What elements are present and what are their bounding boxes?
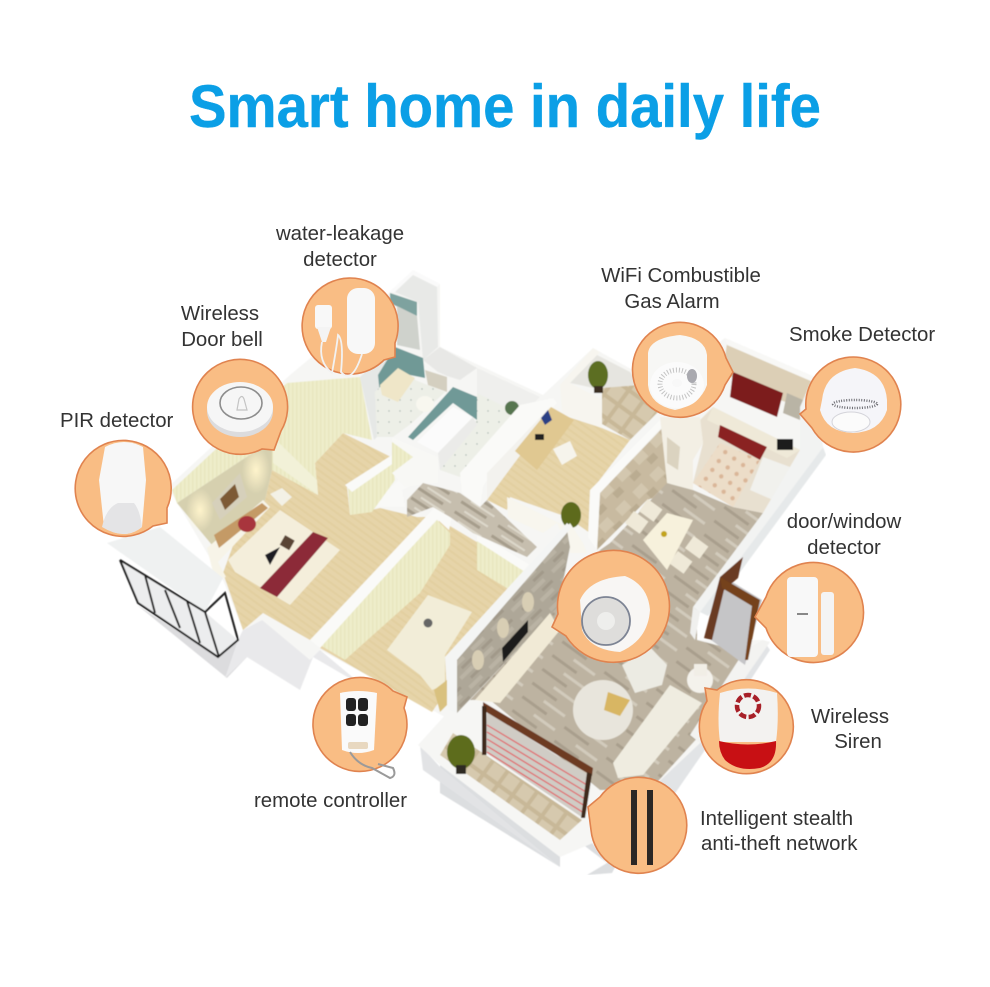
label: wireless door bell: Door bell: [181, 329, 263, 351]
study tile floor: [602, 385, 660, 440]
icon: key ring: [350, 752, 394, 778]
balcony railing: [120, 560, 238, 657]
kitchen carpet: [693, 443, 760, 507]
label: PIR detector: PIR detector: [60, 410, 174, 432]
label: anti-theft network: anti-theft network: [701, 833, 858, 855]
icon: alarm hub: [580, 576, 650, 652]
tub walls: [408, 387, 477, 440]
washbasin unit: [380, 368, 415, 402]
door wall: [690, 607, 700, 640]
kitchen back wall: [723, 343, 813, 407]
title: Smart home in daily life: [189, 73, 821, 140]
TV: [502, 620, 528, 662]
building footprint: [168, 270, 823, 863]
icon: infrared bars: [631, 790, 653, 865]
appliance: [783, 393, 803, 420]
icon: PIR sensor: [99, 442, 146, 534]
armchair: [622, 647, 667, 693]
lower cabinets: [718, 425, 767, 460]
label: water-leakage detector: water-leakage: [275, 223, 404, 245]
label: gas alarm: WiFi Combustible: [601, 265, 761, 287]
label: anti-theft network: [700, 808, 858, 855]
callout: anti-theft network: [588, 777, 687, 873]
callout: water leakage: [302, 278, 398, 376]
label: door/window detector: door/window: [787, 511, 902, 533]
bedroom back wall stripes: [172, 377, 372, 503]
textured wall study/dining: [597, 420, 670, 550]
study floor: [487, 415, 630, 533]
balcony white wall: [418, 713, 600, 857]
floor plan illustration: [107, 270, 826, 875]
bathroom one teal walls: [390, 293, 417, 316]
label: wireless door bell: [181, 303, 263, 351]
label: remote controller: remote controller: [254, 790, 407, 812]
exterior shadow faces: [137, 447, 826, 875]
icon: gas sensor: [648, 335, 707, 410]
callout: smoke detector: [800, 357, 901, 452]
living stone wall: [457, 530, 570, 713]
low wall beside second bedroom: [477, 533, 530, 572]
icon: smoke sensor: [820, 368, 887, 433]
counter: [707, 407, 800, 458]
balcony plant: [447, 735, 475, 774]
bath plant: [505, 401, 519, 415]
bathroom one floor: [375, 372, 445, 437]
toilet: [416, 396, 434, 412]
kitchen partition: [660, 417, 703, 490]
kitchen side wall: [693, 377, 823, 612]
living wall top edge: [445, 523, 572, 713]
kitchen floor: [693, 407, 800, 513]
callout: door/window detector: [755, 562, 864, 662]
label: water-leakage detector: [275, 223, 404, 271]
bedroom floor: [223, 433, 430, 640]
study niche: [570, 355, 640, 390]
bathroom two back wall: [423, 347, 477, 380]
plant: study: [588, 361, 608, 393]
bedroom back wall beige panel: [177, 440, 272, 545]
icon: siren: [718, 688, 778, 769]
second bedroom floor: [320, 520, 527, 712]
kitchen wall top: [725, 338, 815, 382]
callout: door bell: [193, 359, 288, 454]
label: gas alarm: Gas Alarm: [624, 291, 720, 313]
label: water-leakage detector: detector: [303, 249, 377, 271]
sink: [777, 439, 793, 450]
callout: wireless siren: [699, 680, 793, 774]
corridor floor: [407, 483, 537, 557]
label: door/window detector: [787, 511, 902, 559]
second bed: [387, 595, 472, 712]
bathroom column: [395, 273, 438, 360]
icon: water sensor: [315, 288, 375, 376]
TV console: [475, 613, 560, 703]
icon: door sensor: [787, 577, 834, 657]
bathroom two floor: [440, 393, 522, 477]
label: wireless siren: [811, 706, 889, 753]
callout: remote controller: [313, 677, 407, 778]
corridor low walls: [507, 497, 587, 553]
label: anti-theft network: Intelligent stealth: [700, 808, 853, 830]
label: door/window detector: detector: [807, 537, 881, 559]
door: [704, 557, 762, 665]
desk: [515, 407, 577, 470]
upper cabinets: [730, 372, 783, 417]
balcony floor: [440, 733, 582, 840]
label: smoke detector: Smoke Detector: [789, 324, 935, 346]
partition end: [273, 437, 318, 495]
label: wireless siren: Siren: [834, 731, 882, 753]
bathtub: [417, 407, 473, 453]
fridge: [750, 457, 790, 503]
icon: remote: [340, 691, 394, 778]
balcony glass: [120, 560, 238, 657]
callout: PIR detector: [75, 440, 171, 536]
dining and living floor: [470, 483, 763, 790]
round table: [573, 680, 633, 740]
dining table: [625, 499, 708, 574]
callout: central alarm: [552, 550, 669, 662]
label: wireless siren: Wireless: [811, 706, 889, 728]
painting: [212, 473, 247, 520]
second bedroom striped wall: [320, 520, 450, 660]
label: wireless door bell: Wireless: [181, 303, 259, 325]
bathroom partition wall: [360, 352, 424, 440]
bed: [207, 488, 340, 605]
icon: bell unit: [207, 382, 273, 437]
diagonal study wall: [460, 398, 557, 507]
balcony slab: [107, 527, 223, 612]
callout: gas alarm: [632, 322, 733, 417]
sofa: [613, 685, 702, 778]
floor lamp: [687, 664, 713, 693]
wall lamp glows: [472, 592, 534, 670]
label: gas alarm: [601, 265, 761, 313]
alcove low wall: [370, 457, 438, 507]
anti-theft light curtain: [482, 702, 593, 818]
plant: corridor: [561, 502, 581, 528]
wall between bedrooms: [310, 507, 452, 648]
